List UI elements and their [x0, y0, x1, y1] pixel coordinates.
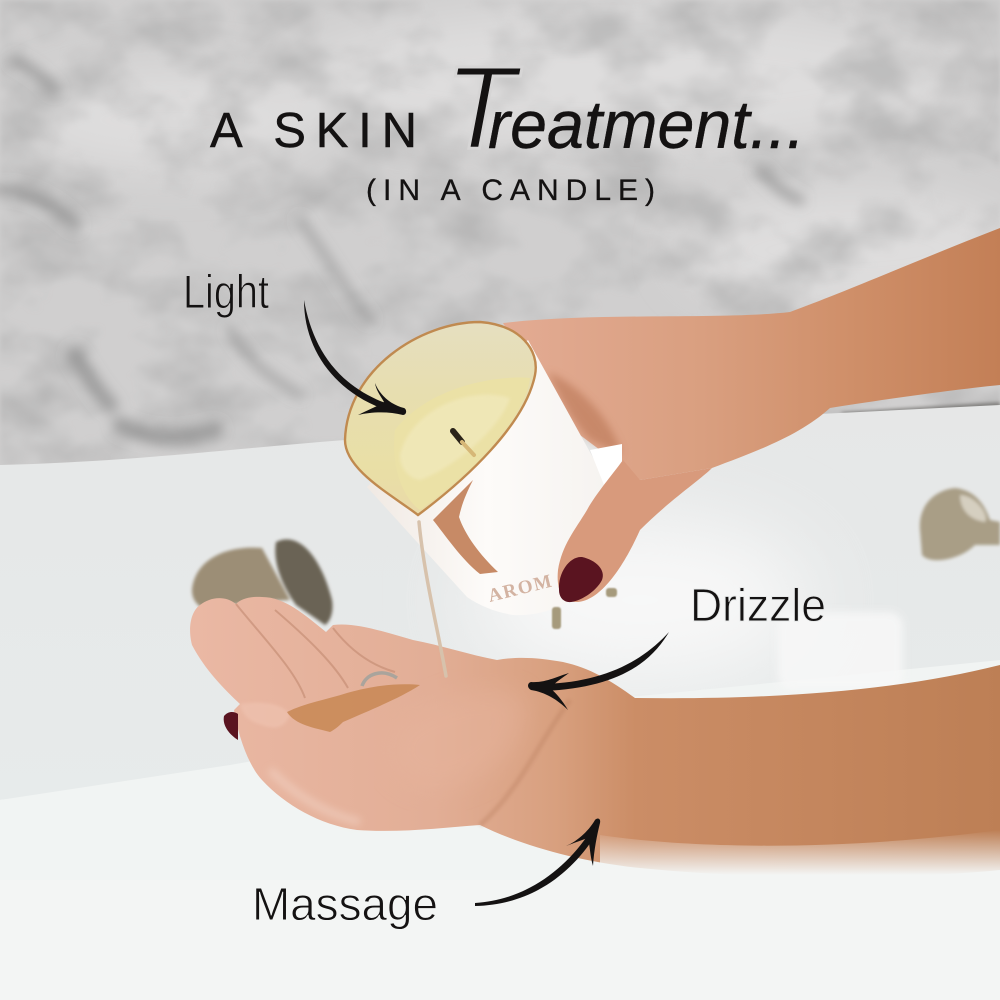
jar rim and wax — [345, 322, 536, 515]
title: (IN A CANDLE) — [366, 174, 655, 207]
counter highlight — [470, 520, 810, 680]
marble wall background — [0, 0, 1000, 470]
copper stripe — [433, 480, 498, 574]
tap left — [192, 539, 333, 625]
arm bottom fade — [600, 830, 1000, 890]
title — [210, 42, 805, 207]
jar brand: AROM — [486, 570, 555, 607]
title: A SKIN — [210, 104, 417, 158]
oil pool — [287, 684, 420, 732]
candle wick — [453, 431, 462, 442]
label: Drizzle: Drizzle — [690, 579, 826, 631]
arrow: Light — [304, 300, 406, 415]
glass blur — [778, 612, 903, 690]
label: Massage: Massage — [252, 878, 438, 930]
jar glare — [590, 444, 622, 490]
label: Light: Light — [183, 265, 269, 318]
white counter ledge — [0, 405, 1000, 800]
icon: dark nail lower — [224, 712, 238, 740]
tap right — [920, 488, 1000, 560]
jar body — [367, 340, 607, 615]
arrow: Massage — [475, 819, 600, 906]
bath tub basin — [0, 660, 1000, 1000]
arrow: Drizzle — [528, 632, 669, 710]
thumb over jar — [558, 460, 712, 602]
upper arm and palm — [503, 228, 1000, 480]
ring — [362, 673, 397, 686]
title: Treatment... — [445, 42, 805, 174]
oil stream — [419, 522, 446, 676]
candle jar — [345, 322, 622, 615]
lower arm and open hand — [190, 597, 1000, 890]
icon: dark nail upper — [559, 557, 603, 602]
melted wax pool — [394, 378, 530, 510]
finger creases — [236, 604, 395, 698]
gold debris — [552, 588, 617, 629]
